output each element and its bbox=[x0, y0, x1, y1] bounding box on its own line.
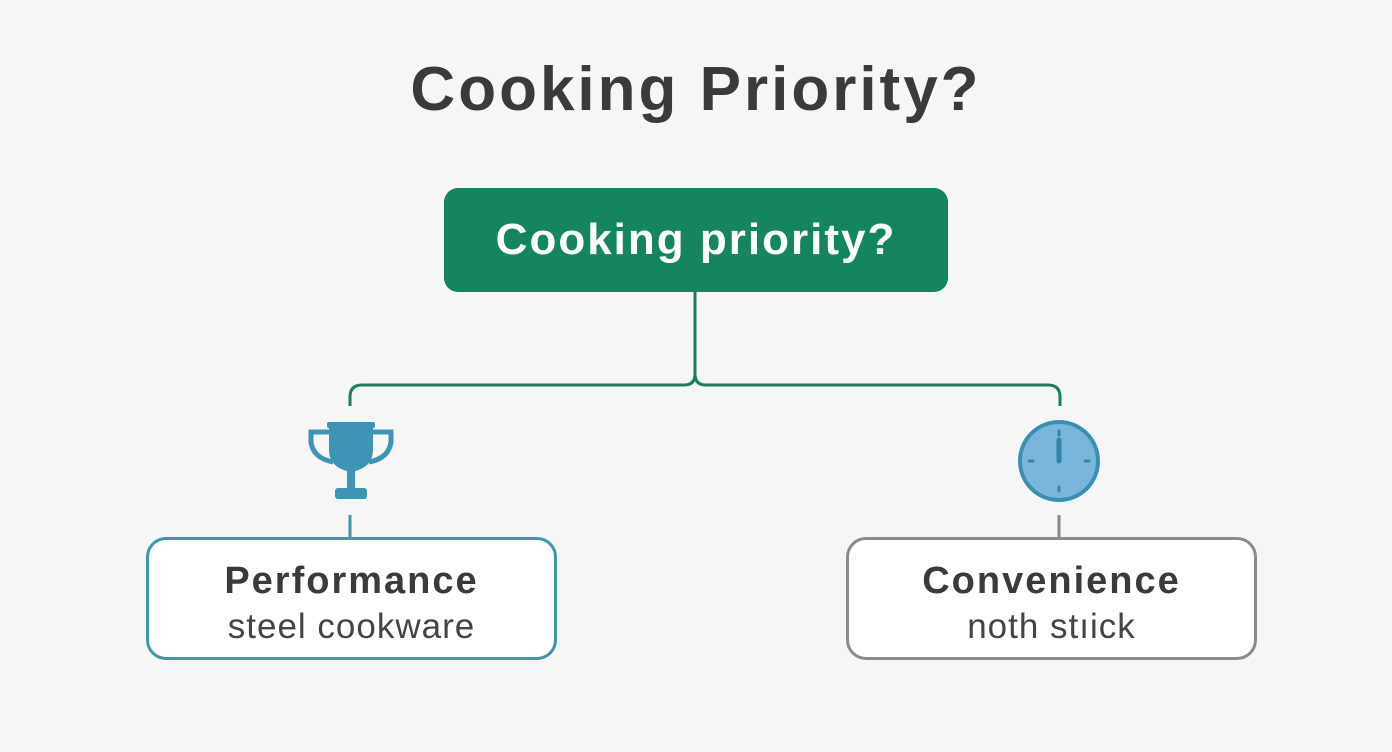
root decision box: Cooking priority? bbox=[496, 215, 896, 264]
panel: convenience bbox=[846, 537, 1257, 660]
icon: trophy bbox=[308, 422, 394, 499]
text: steel cookware: steel cookware bbox=[228, 607, 475, 646]
heading: performance: Performance bbox=[224, 560, 479, 602]
heading: convenience: Convenience bbox=[922, 560, 1181, 602]
icon: clock bbox=[1018, 420, 1100, 502]
root decision box bbox=[444, 188, 948, 292]
text: non-stick: noth stıick bbox=[967, 607, 1136, 646]
title: Cooking Priority? bbox=[410, 55, 982, 124]
panel: performance bbox=[146, 537, 557, 660]
